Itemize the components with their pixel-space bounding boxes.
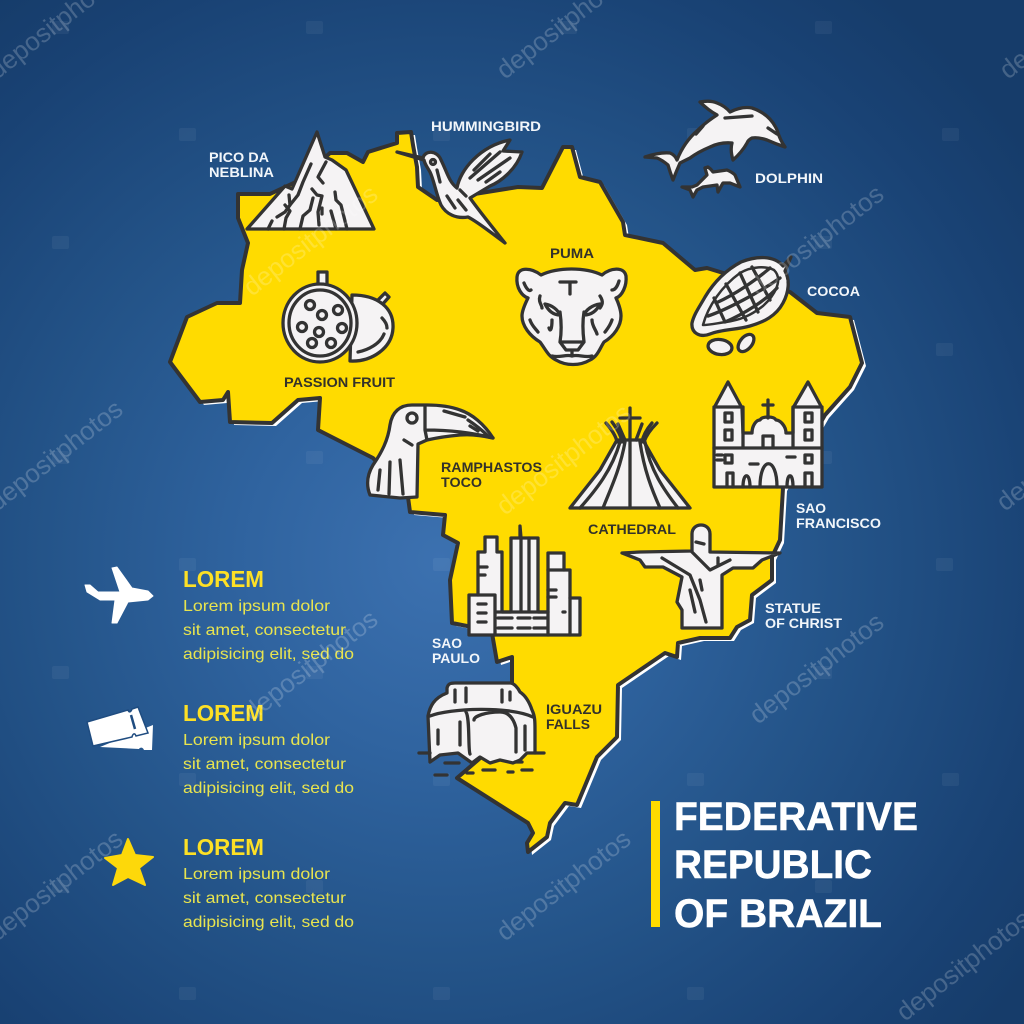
label: Sao Francisco: FRANCISCO	[796, 515, 881, 531]
title: OF BRAZIL	[674, 892, 882, 936]
block: Lorem 3: adipisicing elit, sed do	[183, 914, 354, 931]
title: FEDERATIVE	[674, 795, 918, 839]
block: Lorem 1	[183, 566, 354, 663]
icon: dolphins	[645, 101, 785, 197]
watermarks: depositphotos	[743, 178, 889, 302]
label: Pico da Neblina: NEBLINA	[209, 164, 274, 180]
label: Sao Francisco: SAO	[796, 500, 826, 516]
icon: Pico da Neblina mountain	[247, 132, 374, 229]
block: Lorem 3	[183, 834, 354, 931]
label: Pico da Neblina: PICO DA	[209, 149, 269, 165]
label: Iguazu Falls: FALLS	[546, 716, 590, 732]
icon: star	[105, 839, 153, 885]
label: Pico da Neblina	[209, 149, 274, 180]
watermarks: depositphotos	[490, 397, 636, 521]
icon: passion fruit	[283, 272, 393, 362]
label: Statue of Christ: STATUE	[765, 600, 821, 616]
icon: toucan	[368, 405, 493, 498]
map shadow	[174, 135, 866, 855]
watermarks: depositphotos	[490, 823, 636, 947]
label: Sao Paulo	[432, 635, 480, 666]
block: Lorem 2: Lorem ipsum dolor	[183, 732, 331, 749]
title: REPUBLIC	[674, 843, 872, 887]
label: Passion Fruit: PASSION FRUIT	[284, 374, 395, 390]
watermarks: depositphotos	[743, 606, 889, 730]
label: Puma: PUMA	[550, 245, 594, 261]
block: Lorem 1: adipisicing elit, sed do	[183, 646, 354, 663]
block: Lorem 3: Lorem ipsum dolor	[183, 866, 331, 883]
label: Hummingbird: HUMMINGBIRD	[431, 118, 541, 134]
block: Lorem 1: Lorem ipsum dolor	[183, 598, 331, 615]
block: Lorem 1: LOREM	[183, 566, 264, 592]
block: Lorem 3: sit amet, consectetur	[183, 890, 347, 907]
icon: church	[714, 382, 822, 487]
icon: Iguazu Falls	[419, 683, 544, 775]
icon: puma	[517, 269, 626, 364]
label: Sao Francisco	[796, 500, 881, 531]
label: Ramphastos Toco: TOCO	[441, 474, 482, 490]
label: Iguazu Falls	[546, 701, 602, 732]
label: Statue of Christ	[765, 600, 842, 631]
label: Sao Paulo: SAO	[432, 635, 462, 651]
icon: cocoa pod	[692, 257, 791, 356]
block: Lorem 2: adipisicing elit, sed do	[183, 780, 354, 797]
block: Lorem 2: sit amet, consectetur	[183, 756, 347, 773]
icon: Sao Paulo skyline	[469, 526, 580, 635]
title	[674, 795, 918, 936]
icon: hummingbird	[397, 140, 522, 243]
title bar	[651, 801, 660, 927]
label: Ramphastos Toco	[441, 459, 542, 490]
watermarks: depositphotos	[237, 178, 383, 302]
block: Lorem 2	[183, 700, 354, 797]
label: Iguazu Falls: IGUAZU	[546, 701, 602, 717]
label: Sao Paulo: PAULO	[432, 650, 480, 666]
block: Lorem 1: sit amet, consectetur	[183, 622, 347, 639]
icon: statue of Christ	[622, 525, 780, 628]
icon: cathedral	[570, 408, 690, 508]
block: Lorem 2: LOREM	[183, 700, 264, 726]
icon: tickets	[87, 707, 153, 750]
label: Dolphin: DOLPHIN	[755, 170, 823, 186]
label: Statue of Christ: OF CHRIST	[765, 615, 842, 631]
block: Lorem 3: LOREM	[183, 834, 264, 860]
icon: airplane	[85, 567, 153, 623]
label: Cathedral: CATHEDRAL	[588, 521, 676, 537]
label: Cocoa: COCOA	[807, 283, 860, 299]
watermarks: depositphotos	[237, 603, 383, 727]
map of Brazil	[170, 132, 862, 852]
label: Ramphastos Toco: RAMPHASTOS	[441, 459, 542, 475]
